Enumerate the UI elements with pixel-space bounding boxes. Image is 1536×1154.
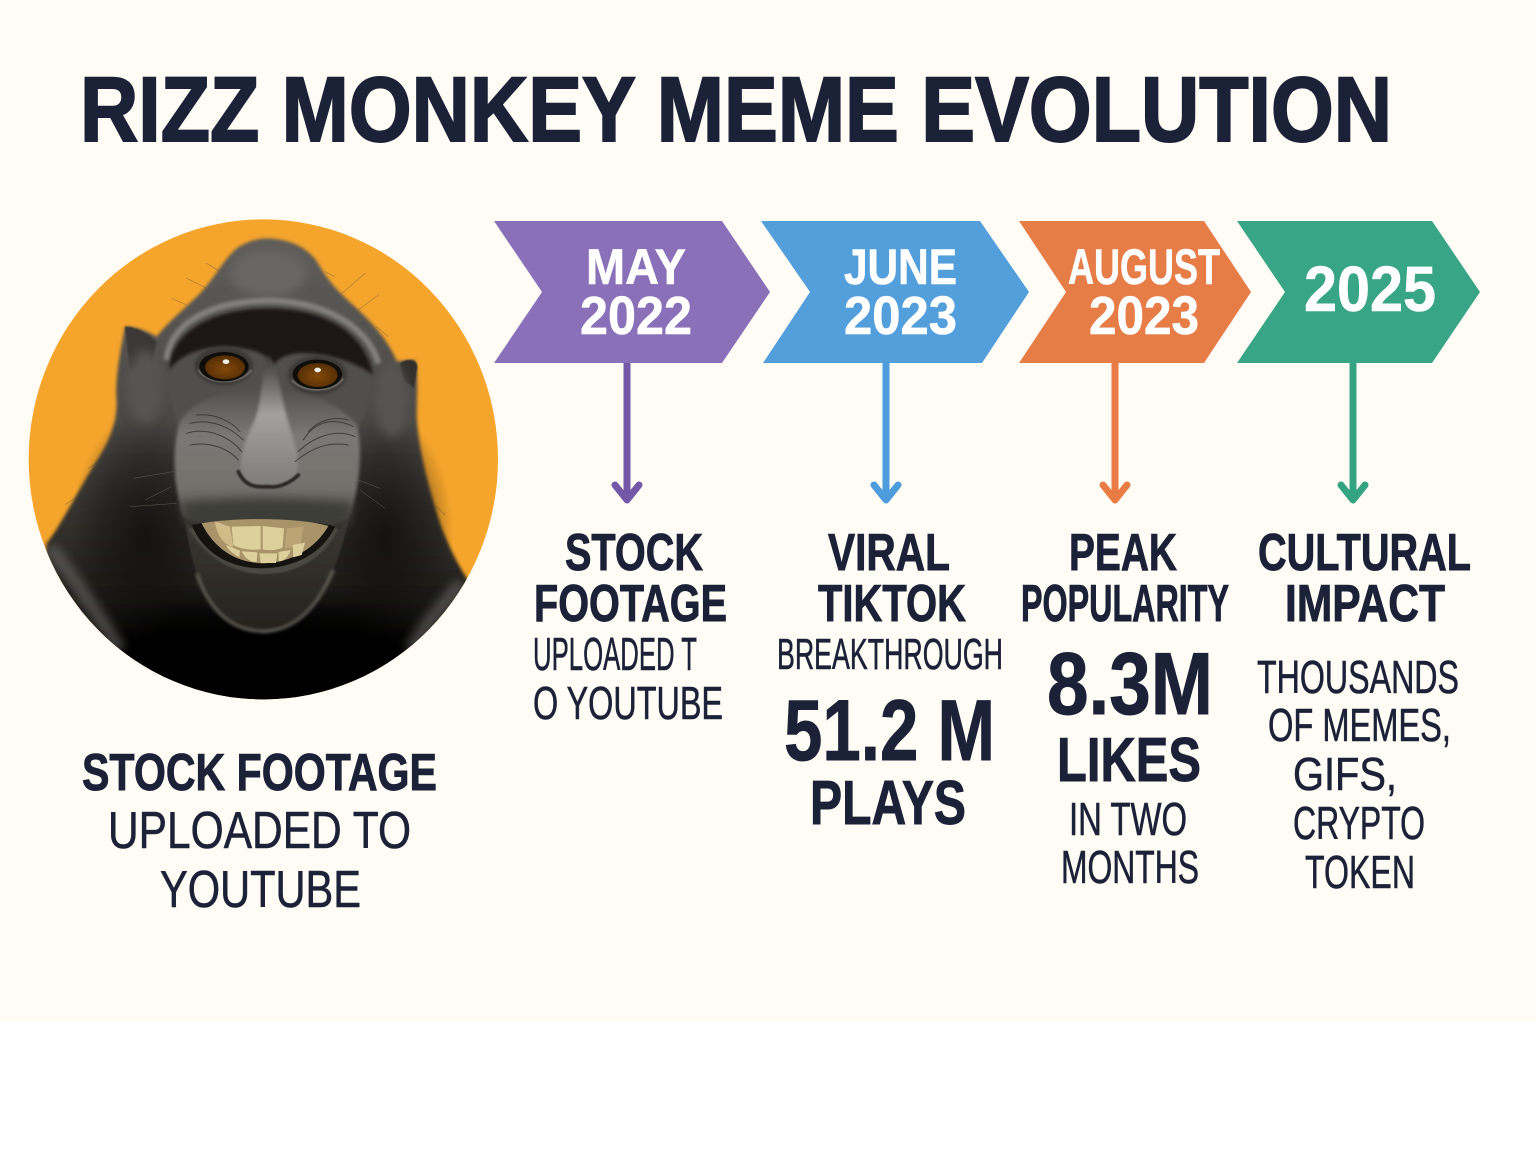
nostrils: [238, 472, 298, 487]
text block: peak popularity: IN TWO: [1069, 793, 1187, 845]
whiskers: [130, 472, 385, 508]
text block: cultural impact: IMPACT: [1285, 575, 1445, 633]
date label: June 2023: 2023: [844, 286, 957, 346]
text block: peak popularity: 8.3M: [1047, 634, 1213, 733]
date label: June 2023: JUNE: [844, 239, 957, 295]
chevron: June 2023: [761, 221, 1029, 363]
date label: June 2023: [844, 239, 957, 346]
left eye: [195, 347, 253, 385]
left caption: UPLOADED TO: [108, 802, 411, 860]
left caption: STOCK FOOTAGE: [82, 744, 437, 802]
text block: cultural impact: [1257, 524, 1471, 898]
dark brow mask: [169, 308, 373, 375]
chevron: August 2023: [1019, 221, 1251, 363]
text block: stock footage: FOOTAGE: [534, 575, 727, 633]
arrow: 2025: [1341, 363, 1365, 500]
text block: stock footage: UPLOADED T: [533, 628, 697, 680]
right eye: [288, 356, 347, 394]
nose bridge: [241, 355, 298, 486]
midface muzzle: [172, 396, 362, 518]
head side fur: [130, 348, 159, 424]
left caption: YOUTUBE: [160, 861, 361, 919]
date label: August 2023: AUGUST: [1068, 239, 1220, 295]
chevron: May 2022: [494, 221, 770, 363]
date label: August 2023: [1068, 239, 1220, 346]
date label: May 2022: MAY: [586, 239, 686, 295]
chevron: 2025: [1237, 221, 1480, 363]
text block: cultural impact: CULTURAL: [1258, 524, 1471, 582]
chin: [185, 520, 348, 632]
upper gum: [202, 519, 328, 563]
arrow: August 2023: [1103, 363, 1127, 500]
title: RIZZ MONKEY MEME EVOLUTION: [80, 59, 1392, 161]
fur strands at silhouette: [65, 263, 445, 515]
lower lip: [188, 528, 338, 574]
timeline step: May 2022: [494, 221, 770, 729]
date label: May 2022: 2022: [580, 286, 692, 346]
monkey body and head silhouette: [33, 238, 487, 710]
left caption: [82, 744, 437, 919]
ears: [125, 327, 157, 370]
text block: viral TikTok: BREAKTHROUGH: [777, 630, 1003, 679]
text block: viral TikTok: VIRAL: [828, 524, 950, 582]
date label: 2025: 2025: [1304, 253, 1436, 325]
text block: viral TikTok: TIKTOK: [818, 575, 966, 633]
text block: peak popularity: MONTHS: [1061, 841, 1199, 893]
text block: peak popularity: PEAK: [1069, 524, 1177, 582]
orange backdrop: [20, 210, 513, 710]
timeline step: June 2023: [761, 221, 1029, 838]
text block: cultural impact: GIFS,: [1293, 748, 1397, 800]
text block: peak popularity: POPULARITY: [1021, 575, 1229, 633]
text block: cultural impact: CRYPTO: [1293, 797, 1425, 849]
text block: cultural impact: OF MEMES,: [1268, 699, 1451, 751]
text block: stock footage: [533, 524, 727, 729]
text block: peak popularity: [1021, 524, 1229, 893]
date label: May 2022: [580, 239, 692, 346]
brow ridge: [167, 301, 378, 363]
crest highlight: [232, 253, 305, 296]
text block: viral TikTok: [777, 524, 1003, 838]
moustache shadow: [180, 498, 353, 532]
text block: cultural impact: TOKEN: [1305, 846, 1415, 898]
timeline step: August 2023: [1019, 221, 1251, 893]
text block: stock footage: STOCK: [565, 524, 703, 582]
upper cheeks: [357, 422, 358, 424]
text block: peak popularity: LIKES: [1057, 726, 1201, 795]
monkey portrait circle: [20, 210, 513, 717]
teeth: [215, 522, 305, 563]
arrow: May 2022: [615, 363, 639, 500]
dark side fur: [80, 427, 194, 594]
text block: viral TikTok: 51.2 M: [784, 683, 995, 779]
date label: August 2023: 2023: [1089, 286, 1199, 346]
facial wrinkles: [187, 415, 355, 462]
light fur rim at lower edges: [50, 547, 120, 650]
text block: stock footage: O YOUTUBE: [533, 677, 723, 729]
text block: viral TikTok: PLAYS: [810, 769, 966, 838]
open mouth: [192, 520, 335, 568]
timeline step: 2025: [1237, 221, 1480, 898]
dark lower fur: [96, 600, 426, 700]
arrow: June 2023: [874, 363, 898, 500]
